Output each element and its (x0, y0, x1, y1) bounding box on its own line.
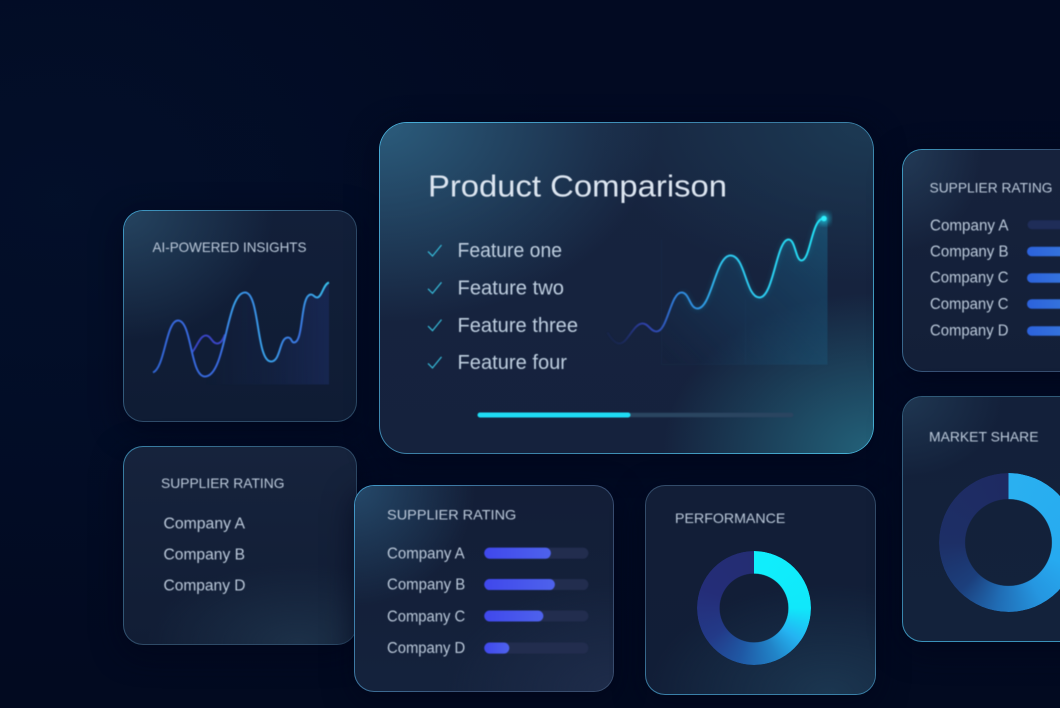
panel: supplier rating, left (123, 446, 357, 645)
panel: AI-powered insights (123, 210, 357, 422)
row: company D: Company D (930, 322, 1008, 339)
feature four: Feature four (458, 352, 567, 374)
row: company C: Company C (930, 295, 1008, 312)
heading: supplier rating: SUPPLIER RATING (387, 507, 516, 523)
donut chart: performance (696, 550, 810, 664)
heading: supplier rating: SUPPLIER RATING (160, 475, 284, 491)
progress bar (478, 412, 794, 418)
row: company D (930, 322, 1060, 339)
feature two: Feature two (458, 278, 564, 300)
heading: market share: MARKET SHARE (928, 428, 1038, 444)
row: company C: Company C (930, 269, 1008, 286)
panel: supplier rating, centre (354, 484, 614, 692)
heading: supplier rating: SUPPLIER RATING (929, 179, 1052, 195)
list: companies: Company D (163, 577, 245, 594)
panel: product comparison (378, 122, 874, 454)
line chart: insights (152, 282, 328, 384)
list: companies (163, 515, 245, 594)
row: company B (930, 243, 1060, 260)
feature one: Feature one (458, 240, 562, 262)
row: company C: Company C (387, 609, 465, 626)
panel: market share (902, 396, 1060, 642)
row: company C (930, 269, 1060, 286)
row: company D: Company D (387, 640, 465, 657)
line chart: product trend (608, 212, 830, 364)
row: company A: Company A (387, 546, 465, 563)
row: company A (387, 546, 588, 563)
row: company A: Company A (930, 217, 1009, 234)
row: company B: Company B (387, 577, 465, 594)
list: companies: Company B (163, 546, 244, 563)
row: company B (387, 577, 588, 594)
row: company B: Company B (930, 243, 1008, 260)
row: company A (930, 217, 1060, 234)
row: company D (387, 640, 588, 657)
list: companies: Company A (163, 515, 245, 532)
title: Product Comparison (428, 168, 727, 204)
panel: supplier rating, right (902, 149, 1060, 372)
donut chart: market share (939, 473, 1060, 612)
panel: performance (644, 485, 876, 694)
heading: AI-powered insights: AI-POWERED INSIGHTS (152, 239, 306, 255)
feature three: Feature three (458, 315, 578, 337)
row: company C (930, 295, 1060, 312)
heading: performance: PERFORMANCE (675, 509, 785, 525)
row: company C (387, 609, 588, 626)
